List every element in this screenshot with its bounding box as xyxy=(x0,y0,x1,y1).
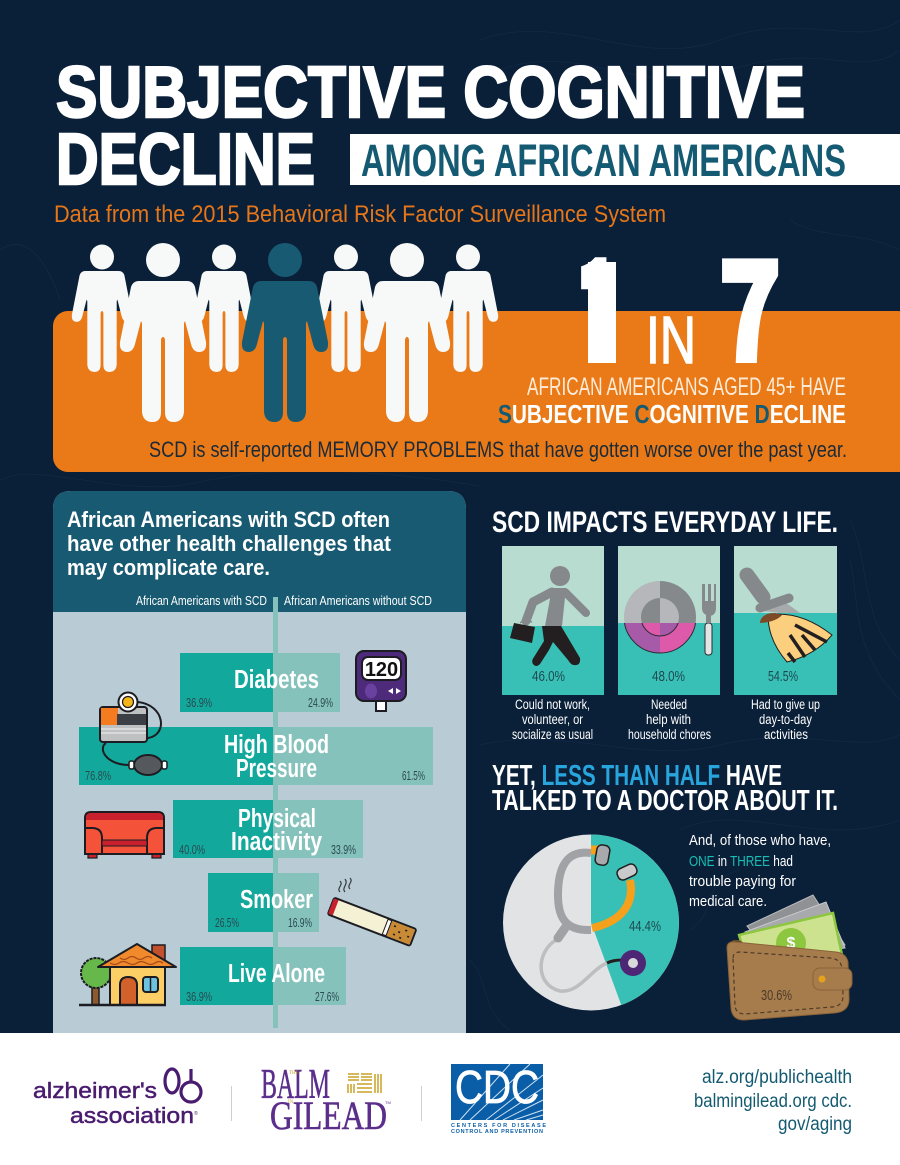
logo: Balm in Gilead: THE xyxy=(289,1071,299,1076)
captions for everyday life panels: volunteer, or xyxy=(522,712,583,727)
logo: CDC xyxy=(451,1061,546,1135)
bar: physical inactivity xyxy=(173,800,363,858)
icon: sofa xyxy=(85,812,164,858)
captions for everyday life panels: socialize as usual xyxy=(512,727,593,742)
logo: CDC: CONTROL AND PREVENTION xyxy=(451,1129,543,1135)
panel header xyxy=(53,491,466,612)
legend: African Americans without SCD xyxy=(284,594,432,608)
icon: glucose meter xyxy=(356,651,406,711)
icon: blood pressure cuff xyxy=(100,692,167,775)
icon: wallet with money: $ xyxy=(787,935,796,952)
web links: gov/aging xyxy=(778,1114,852,1135)
panel: needed help xyxy=(618,546,720,695)
panel: needed help: 48.0% xyxy=(652,669,685,685)
icon: walking man with briefcase xyxy=(510,566,586,666)
pie chart: 44.4 percent with stethoscope xyxy=(503,834,679,1010)
divider two xyxy=(421,1086,422,1121)
bar: diabetes: 24.9% xyxy=(308,696,333,710)
bar: physical inactivity: Physical xyxy=(238,805,316,833)
text: one in three: trouble paying for xyxy=(689,874,796,890)
web links: alz.org/publichealth xyxy=(702,1067,852,1088)
web links xyxy=(694,1067,852,1135)
captions for everyday life panels: Had to give up xyxy=(751,697,820,712)
logo: Alzheimer's Association xyxy=(33,1069,201,1128)
icon: cigarette xyxy=(328,878,416,946)
title xyxy=(56,53,805,200)
bar: diabetes: Diabetes xyxy=(234,666,319,694)
bar: smoker: 16.9% xyxy=(288,916,312,930)
captions for everyday life panels: Could not work, xyxy=(515,697,590,712)
text: one in three: And, of those who have, xyxy=(689,833,831,849)
statistic caption xyxy=(498,373,846,429)
logo: Balm in Gilead: GILEAD xyxy=(270,1093,387,1138)
panel header: have other health challenges that xyxy=(67,531,392,556)
logo: Balm in Gilead xyxy=(261,1062,391,1138)
text: one in three: ONE in THREE had xyxy=(689,854,793,870)
panel background xyxy=(53,491,466,1033)
divider one xyxy=(231,1086,232,1121)
statistic: 1 in 7: IN xyxy=(646,303,696,378)
logo: Alzheimer's Association: ® xyxy=(194,1110,198,1117)
icon: stethoscope xyxy=(541,844,646,991)
panel: had to give up xyxy=(734,546,837,695)
panel header: may complicate care. xyxy=(67,555,270,580)
title: DECLINE xyxy=(56,120,315,200)
chart axis xyxy=(273,597,278,1028)
data source line: Data from the 2015 Behavioral Risk Factor Surveillance System xyxy=(54,201,666,228)
panel: could not work: 46.0% xyxy=(532,669,565,685)
statistic caption: SUBJECTIVE COGNITIVE DECLINE xyxy=(498,399,846,429)
icon: wallet with money: 30.6% xyxy=(761,988,792,1004)
logo: CDC: CENTERS FOR DISEASE xyxy=(451,1123,546,1129)
bar: diabetes: 36.9% xyxy=(186,696,212,710)
logo: Balm in Gilead: BALM xyxy=(261,1062,330,1108)
statistic: 1 in 7: 1 xyxy=(577,207,617,395)
title: SUBJECTIVE COGNITIVE xyxy=(56,53,805,133)
heading: less than half talked to a doctor xyxy=(492,760,838,817)
bar: physical inactivity: 40.0% xyxy=(179,843,205,857)
captions for everyday life panels: day-to-day xyxy=(759,712,812,727)
bar: high blood pressure: High Blood xyxy=(224,731,329,759)
statistic: 1 in 7: 7 xyxy=(720,204,780,398)
captions for everyday life panels: household chores xyxy=(628,727,711,742)
logo: Alzheimer's Association: association xyxy=(70,1103,194,1128)
web links: balmingilead.org cdc. xyxy=(694,1091,852,1112)
bar: live alone xyxy=(180,947,346,1005)
panel header: African Americans with SCD often xyxy=(67,507,390,532)
bar: smoker xyxy=(208,873,319,932)
bar: live alone: 36.9% xyxy=(186,990,212,1004)
icon: glucose meter: 120 xyxy=(365,659,398,681)
icon: plate and fork xyxy=(624,581,716,655)
bar: live alone: 27.6% xyxy=(315,990,339,1004)
footer band xyxy=(0,1033,900,1165)
heading: less than half talked to a doctor: YET, LESS THAN HALF HAVE xyxy=(492,760,782,792)
logo: CDC: CDC xyxy=(455,1061,539,1113)
bar: high blood pressure: 61.5% xyxy=(402,769,425,783)
icon: wallet with money xyxy=(727,895,852,1020)
bar: high blood pressure: 76.8% xyxy=(85,769,111,783)
captions for everyday life panels: help with xyxy=(646,712,691,727)
icon: broom xyxy=(747,575,832,662)
logo: Balm in Gilead: TM xyxy=(385,1100,391,1105)
text: one in three xyxy=(689,833,831,910)
pie chart: 44.4 percent with stethoscope: 44.4% xyxy=(629,919,661,935)
bar: high blood pressure: Pressure xyxy=(236,755,317,783)
captions for everyday life panels: Needed xyxy=(651,697,687,712)
statistic: 1 in 7 xyxy=(572,204,780,398)
bar: smoker: Smoker xyxy=(240,886,313,914)
captions for everyday life panels xyxy=(512,697,820,742)
bar: diabetes xyxy=(180,653,340,712)
legend xyxy=(136,594,432,608)
logo: Alzheimer's Association: alzheimer's xyxy=(33,1078,157,1103)
legend: African Americans with SCD xyxy=(136,594,267,608)
logo: Balm in Gilead: IN xyxy=(288,1100,294,1105)
bar: high blood pressure xyxy=(79,727,433,785)
bar: live alone: Live Alone xyxy=(228,960,325,988)
panel: health challenges xyxy=(53,491,466,1033)
panel: had to give up: 54.5% xyxy=(768,669,798,685)
panel: 1 in 7 orange band xyxy=(53,311,900,472)
icon: house and tree xyxy=(79,944,176,1005)
bar: physical inactivity: Inactivity xyxy=(231,828,323,856)
bar: smoker: 26.5% xyxy=(215,916,239,930)
panel: could not work xyxy=(502,546,604,695)
captions for everyday life panels: activities xyxy=(764,727,808,742)
icon: row of seven people, one highlighted xyxy=(72,243,498,422)
bar: physical inactivity: 33.9% xyxy=(331,843,356,857)
text: one in three: medical care. xyxy=(689,894,767,910)
